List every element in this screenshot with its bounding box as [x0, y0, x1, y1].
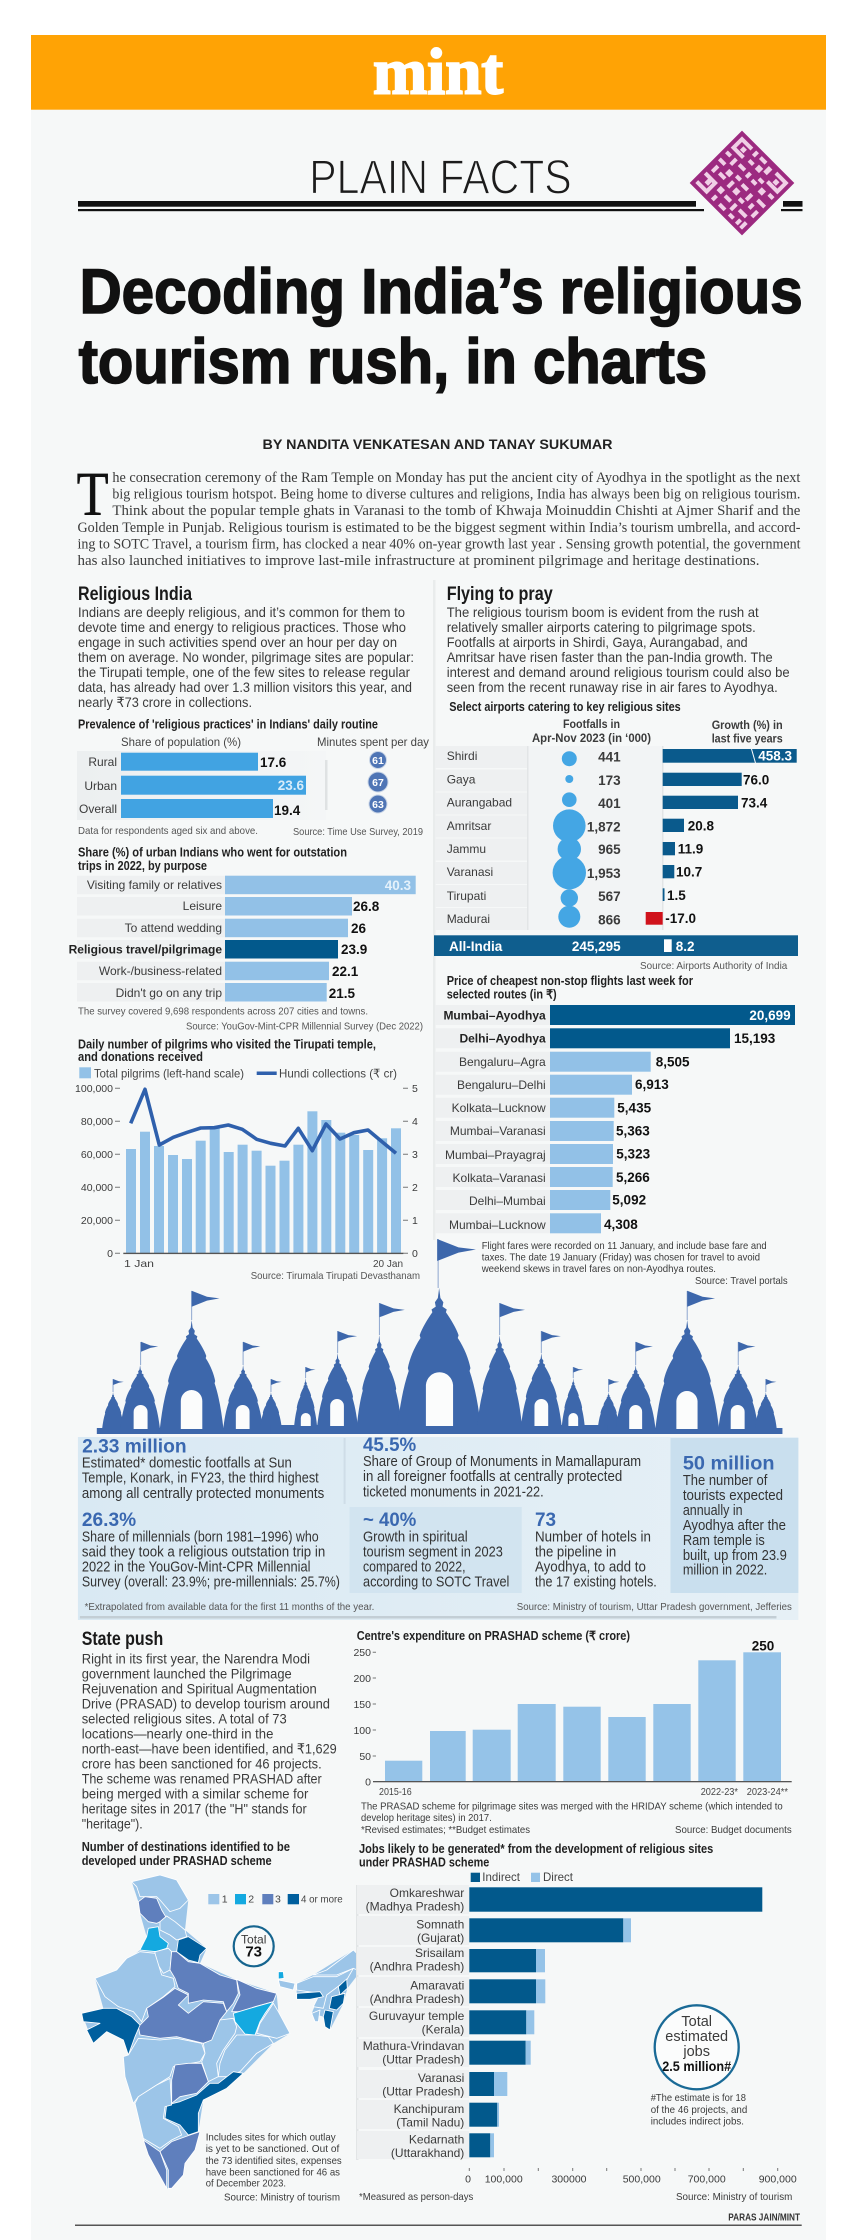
chart: trip purpose: To attend wedding [125, 921, 222, 935]
chart: jobs generated: (Uttar Pradesh) [382, 2084, 464, 2098]
right axis: 0 [412, 1248, 418, 1260]
chart: airports footfalls and growth: Select airports catering to key religious sites [449, 700, 681, 714]
chart: prashad expenditure: 0 [365, 1776, 371, 1788]
chart: religious practices prevalence: Minutes spent per day [317, 735, 429, 749]
chart: airports footfalls and growth [434, 700, 798, 972]
chart: flight prices: Mumbai–Lucknow [449, 1218, 546, 1232]
chart: tirupati pilgrims and donations: Source: Tirumala Tirupati Devasthanam [251, 1270, 420, 1282]
chart: jobs generated [356, 1842, 797, 2203]
masthead band [31, 35, 826, 110]
chart: airports footfalls and growth: 458.3 [758, 748, 792, 764]
chart: flight prices: Flight fares were recorded on 11 January, and include base fare and [482, 1240, 767, 1252]
panel: state push [82, 1629, 797, 2204]
text block: flying to pray: relatively smaller airports catering to pilgrimage spots. [447, 619, 756, 635]
chart: jobs generated: (Tamil Nadu) [396, 2116, 464, 2130]
chart: airports footfalls and growth: Jammu [447, 842, 486, 856]
callout: total estimated jobs: 2.5 million# [662, 2059, 732, 2074]
chart: jobs generated: Kanchipuram [394, 2102, 464, 2116]
text block: state push: selected religious sites. A total of 73 [82, 1711, 287, 1727]
chart: flight prices: taxes. The date 19 January (Friday) was chosen for travel to avoid [482, 1252, 760, 1264]
chart: trip purpose: Visiting family or relatives [87, 878, 222, 892]
chart: airports footfalls and growth: -17.0 [665, 911, 696, 926]
legend: Indirect [482, 1870, 521, 1884]
chart: jobs generated: Amaravati [410, 1978, 464, 1992]
right axis: 2 [412, 1182, 418, 1194]
stat: 50 million: The number of [683, 1473, 768, 1489]
chart: airports footfalls and growth: 1.5 [667, 888, 686, 903]
chart: trip purpose: 23.9 [341, 942, 367, 957]
chart: tirupati pilgrims and donations [75, 1038, 420, 1282]
chart: flight prices: Bengaluru–Agra [459, 1055, 546, 1069]
chart: trip purpose: Source: YouGov-Mint-CPR Millennial Survey (Dec 2022) [186, 1020, 423, 1032]
chart: airports footfalls and growth: 73.4 [741, 796, 768, 810]
chart: trip purpose: 26 [351, 921, 367, 936]
map legend: 4 or more [301, 1894, 343, 1906]
chart: religious practices prevalence: Rural [88, 755, 117, 769]
chart: airports footfalls and growth: Shirdi [447, 749, 477, 763]
text block: flying to pray: seen from the recent runaway rise in air fares to Ayodhya. [447, 679, 778, 695]
chart: airports footfalls and growth: Varanasi [447, 865, 493, 879]
chart: jobs generated: Guruvayur temple [369, 2009, 465, 2023]
chart: airports footfalls and growth: 173 [598, 773, 621, 788]
credit: PARAS JAIN/MINT [728, 2212, 800, 2224]
text block: state push: locations—nearly one-third in the [82, 1726, 274, 1742]
legend: Total pilgrims (left-hand scale) [94, 1066, 244, 1080]
stat: 26.3%: 26.3% [82, 1510, 136, 1531]
chart: religious practices prevalence: Prevalence of 'religious practices' in Indians' daily routine [78, 718, 378, 732]
stat: 50 million: built, up from 23.9 [683, 1548, 787, 1564]
stat: 50 million [683, 1453, 787, 1578]
logo: mint: mint [373, 35, 503, 108]
chart: airports footfalls and growth: 401 [598, 796, 621, 811]
chart: jobs generated: (Madhya Pradesh) [366, 1900, 464, 1914]
stat: 26.3%: 2022 in the YouGov-Mint-CPR Millennial [82, 1560, 310, 1576]
intro text block: Golden Temple in Punjab. Religious tourism is estimated to be the biggest segment within India’s tourism umbrella, and accord- [78, 520, 800, 536]
chart: jobs generated: (Uttar Pradesh) [382, 2052, 464, 2066]
left axis: 80,000 [81, 1116, 113, 1128]
chart: jobs generated: (Andhra Pradesh) [370, 1992, 464, 2006]
stat: 40%: ~ 40% [363, 1510, 416, 1531]
intro text block [77, 461, 801, 569]
map of India [82, 1875, 367, 2188]
chart: flight prices: Mumbai–Prayagraj [445, 1148, 546, 1162]
stat: 73 hotels [535, 1510, 657, 1591]
title: tourism rush, in charts [79, 327, 707, 397]
chart: flight prices: 5,092 [612, 1192, 646, 1208]
intro text block: Think about the popular temple ghats in Varanasi to the tomb of Khwaja Moinuddin Chishti at Ajmer Sharif and the [112, 503, 801, 519]
stat: 73 hotels: the 17 existing hotels. [535, 1575, 657, 1591]
chart: religious practices prevalence: 17.6 [260, 755, 287, 770]
section label: plain facts [78, 151, 802, 211]
x axis: 0 [465, 2173, 471, 2185]
chart: flight prices: 6,913 [635, 1077, 669, 1092]
chart: flight prices: 5,323 [616, 1146, 651, 1162]
chart: religious practices prevalence: Urban [84, 779, 117, 793]
chart: prashad expenditure: 2023-24** [747, 1786, 788, 1798]
chart: trip purpose: Religious travel/pilgrimage [69, 942, 222, 956]
callout: total estimated jobs: Total [681, 2014, 712, 2030]
chart: jobs generated: Omkareshwar [390, 1886, 464, 1900]
chart: airports footfalls and growth: 866 [598, 912, 621, 928]
chart: jobs generated: (Kerala) [422, 2022, 464, 2036]
map legend: 1 [222, 1894, 228, 1906]
chart: religious practices prevalence [77, 718, 429, 838]
stat: 40%: according to SOTC Travel [363, 1575, 509, 1591]
chart: prashad expenditure: The PRASAD scheme for pilgrimage sites was merged with the HRIDAY scheme (which intended to [361, 1800, 783, 1812]
section label: plain facts: PLAIN FACTS [309, 151, 572, 204]
chart: airports footfalls and growth: Apr-Nov 2023 (in ‘000) [532, 731, 651, 745]
text block: state push [82, 1651, 337, 1832]
intro text block: he consecration ceremony of the Ram Temple on Monday has put the ancient city of Ayodhya in the spotlight as the next [112, 470, 801, 486]
stat: 2.33 million: Estimated* domestic footfalls at Sun [82, 1456, 292, 1472]
chart: jobs generated: (Andhra Pradesh) [370, 1960, 464, 1974]
chart: trip purpose: Didn't go on any trip [116, 986, 222, 1000]
chart: destinations map: Includes sites for which outlay [206, 2132, 336, 2144]
stat: 26.3%: Survey (overall: 23.9%; pre-millennials: 25.7%) [82, 1575, 340, 1591]
chart: jobs generated: *Measured as person-days [359, 2191, 473, 2203]
chart: flight prices: Price of cheapest non-stop flights last week for [447, 974, 693, 988]
text block: religious india: Indians are deeply religious, and it’s common for them to [78, 604, 405, 620]
right axis: 4 [412, 1116, 418, 1128]
stat: 2.33 million: among all centrally protected monuments [82, 1486, 324, 1502]
text block: state push: "heritage"). [82, 1816, 143, 1832]
title [79, 257, 803, 397]
chart: destinations map: of December 2023. [206, 2178, 286, 2190]
stat: 2.33 million: Temple, Konark, in FY23, the third highest [82, 1471, 319, 1487]
chart: airports footfalls and growth: 1,872 [587, 820, 621, 834]
text block: religious india: them on average. No wonder, pilgrimage sites are popular: [78, 649, 414, 665]
panel: religious india [69, 584, 429, 1282]
text block: flying to pray: The religious tourism boom is evident from the rush at [447, 604, 759, 620]
text block: flying to pray: Amritsar have risen faster than the pan-India growth. The [447, 649, 773, 665]
chart: prashad expenditure: 2015-16 [379, 1786, 412, 1798]
stat: 40%: tourism segment in 2023 [363, 1545, 503, 1561]
chart: flight prices: 4,308 [604, 1217, 638, 1232]
chart: flight prices: 15,193 [734, 1031, 776, 1046]
chart: flight prices: selected routes (in ₹) [447, 988, 557, 1002]
chart: airports footfalls and growth: 76.0 [743, 772, 769, 788]
stat: 45.5%: in all foreigner footfalls at centrally protected [363, 1469, 622, 1485]
chart: jobs generated: (Gujarat) [417, 1931, 464, 1945]
stat: 2.33 million [82, 1437, 324, 1502]
panel: flying to pray [434, 584, 798, 1287]
panel: key statistics: *Extrapolated from available data for the first 11 months of the year. [85, 1602, 374, 1613]
chart: trip purpose: 40.3 [385, 878, 411, 893]
callout: total estimated jobs [655, 2005, 739, 2089]
text block: state push: Right in its first year, the Narendra Modi [82, 1651, 310, 1667]
legend [471, 1870, 574, 1884]
legend: Direct [543, 1870, 574, 1884]
right axis: 3 [412, 1149, 418, 1161]
text block: flying to pray [447, 604, 790, 695]
chart: jobs generated: Mathura-Vrindavan [363, 2039, 464, 2053]
left axis: 40,000 [81, 1182, 113, 1194]
map legend: 2 [248, 1894, 254, 1906]
chart: flight prices: Kolkata–Varanasi [453, 1171, 546, 1185]
chart: religious practices prevalence: 23.6 [278, 778, 304, 793]
all-india row: 8.2 [676, 939, 694, 954]
x axis: 100,000 [485, 2173, 523, 2185]
chart: destinations map: developed under PRASHAD scheme [82, 1854, 272, 1868]
minutes bubbles: 67 [372, 777, 384, 789]
chart: jobs generated: Jobs likely to be generated* from the development of religious sites [359, 1842, 713, 1856]
chart: religious practices prevalence: Overall [79, 802, 117, 816]
stat: 50 million: million in 2022. [683, 1562, 767, 1578]
chart: airports footfalls and growth: 567 [598, 889, 621, 904]
stat: 50 million: annually in [683, 1503, 743, 1519]
text block: state push: north-east—have been identified, and ₹1,629 [82, 1741, 337, 1757]
all-india row [434, 935, 798, 956]
chart: jobs generated: (Uttarakhand) [391, 2146, 464, 2160]
chart: flight prices: 5,363 [616, 1124, 650, 1138]
chart: airports footfalls and growth: 965 [598, 842, 621, 857]
stat: 26.3% [82, 1510, 340, 1591]
x axis [465, 2168, 797, 2185]
chart: airports footfalls and growth: Source: Airports Authority of India [640, 960, 787, 972]
intro text block: ing to SOTC Travel, a tourism firm, has clocked a near 40% on-year growth last year . Sensing growth potential, the government [78, 536, 801, 552]
row stripes [435, 746, 527, 930]
chart: trip purpose: Leisure [183, 899, 222, 913]
text block: state push: being merged with a similar scheme for [82, 1786, 309, 1802]
title: Decoding India’s religious [80, 257, 803, 327]
bars [126, 1111, 401, 1253]
stat: 2.33 million: 2.33 million [82, 1437, 187, 1458]
chart: flight prices: Source: Travel portals [695, 1275, 788, 1287]
text block: state push: Rejuvenation and Spiritual Augmentation [82, 1681, 317, 1697]
chart: jobs generated: under PRASHAD scheme [359, 1856, 489, 1870]
chart: airports footfalls and growth: 20.8 [688, 818, 714, 834]
chart: religious practices prevalence: 19.4 [274, 803, 301, 818]
chart: prashad expenditure: 150 [353, 1699, 371, 1711]
chart: trip purpose: trips in 2022, by purpose [78, 859, 207, 873]
chart: airports footfalls and growth: Growth (%) in [712, 718, 783, 732]
hundi line [131, 1089, 396, 1153]
heading: religious india: Religious India [78, 584, 192, 605]
stat: 50 million: Ram temple is [683, 1533, 765, 1549]
text block: religious india: data, has already had over 1.3 million visitors this year, and [78, 679, 412, 695]
callout: total 73: Total [241, 1932, 266, 1946]
left axis: 100,000 [75, 1083, 113, 1095]
chart: religious practices prevalence: Source: Time Use Survey, 2019 [293, 826, 423, 838]
chart: prashad expenditure: 100 [353, 1725, 371, 1737]
chart: jobs generated: Varanasi [418, 2071, 464, 2085]
text block: religious india: devote time and energy to religious practices. Those who [78, 619, 406, 635]
chart: religious practices prevalence: Data for respondents aged six and above. [78, 825, 258, 837]
stat: 50 million: tourists expected [683, 1488, 783, 1504]
map legend: 3 [275, 1894, 281, 1906]
chart: trip purpose: 21.5 [329, 986, 355, 1001]
callout: total estimated jobs: estimated [665, 2029, 728, 2045]
text block: religious india: nearly ₹73 crore in collections. [78, 694, 252, 710]
x axis: 300000 [551, 2173, 587, 2185]
stat: 73 hotels: Ayodhya, to add to [535, 1560, 646, 1576]
stat: 26.3%: said they took a religious outstation trip in [82, 1545, 325, 1561]
all-india row: All-India [449, 939, 503, 954]
chart: destinations map: Number of destinations identified to be [82, 1840, 290, 1854]
heading: state push: State push [82, 1629, 163, 1650]
chart: prashad expenditure: Centre's expenditure on PRASHAD scheme (₹ crore) [357, 1629, 630, 1643]
chart: tirupati pilgrims and donations: 1 Jan [124, 1258, 154, 1270]
minutes bubbles: 61 [372, 755, 384, 767]
stat: 73 hotels: 73 [535, 1510, 556, 1531]
text block: state push: government launched the Pilgrimage [82, 1666, 292, 1682]
chart: trip purpose: 26.8 [353, 899, 380, 914]
chart: prashad expenditure [353, 1629, 792, 1836]
chart: airports footfalls and growth: Gaya [447, 772, 476, 786]
stat: 50 million: 50 million [683, 1453, 774, 1474]
chart: airports footfalls and growth: 10.7 [676, 864, 702, 880]
chart: trip purpose: 22.1 [332, 964, 359, 979]
stat: 45.5%: Share of Group of Monuments in Mamallapuram [363, 1454, 641, 1470]
x axis: 500,000 [623, 2173, 661, 2185]
legend [79, 1066, 397, 1080]
stat: 45.5% [363, 1435, 641, 1501]
chart: trip purpose [69, 846, 423, 1032]
x axis: 700,000 [688, 2173, 726, 2185]
chart: prashad expenditure: 200 [353, 1673, 371, 1685]
chart: flight prices: 5,435 [617, 1100, 652, 1116]
chart: jobs generated: Srisailam [415, 1946, 464, 1960]
minutes bubbles: 63 [372, 799, 384, 811]
right axis: 1 [412, 1215, 418, 1227]
chart: airports footfalls and growth: Footfalls in [563, 717, 620, 731]
growth bars [663, 749, 797, 901]
chart: jobs generated: #The estimate is for 18 [651, 2092, 746, 2104]
chart: flight prices: Mumbai–Varanasi [450, 1124, 546, 1138]
chart: jobs generated: of the 46 projects, and [651, 2104, 747, 2116]
chart: airports footfalls and growth: Aurangabad [447, 796, 512, 810]
right axis: 5 [412, 1083, 418, 1095]
chart: flight prices: Mumbai–Ayodhya [443, 1008, 546, 1022]
callout: total 73: 73 [245, 1944, 262, 1960]
chart: prashad expenditure: 2022-23* [701, 1786, 738, 1798]
legend: Hundi collections (₹ cr) [279, 1066, 397, 1080]
chart: airports footfalls and growth: 11.9 [678, 842, 703, 856]
callout: total 73 [234, 1926, 274, 1966]
chart: jobs generated: Somnath [416, 1918, 464, 1932]
byline: BY NANDITA VENKATESAN AND TANAY SUKUMAR [262, 437, 613, 452]
chart: airports footfalls and growth: Madurai [447, 912, 490, 926]
heading: flying to pray: Flying to pray [447, 584, 553, 605]
chart: flight prices: Delhi–Mumbai [469, 1194, 546, 1208]
left axis: 0 [107, 1248, 113, 1260]
map legend [208, 1894, 343, 1906]
stat: 40%: compared to 2022, [363, 1560, 466, 1576]
stat: 50 million: Ayodhya after the [683, 1518, 786, 1534]
chart: airports footfalls and growth: 1,953 [587, 866, 621, 881]
chart: airports footfalls and growth: Tirupati [447, 889, 486, 903]
text block: flying to pray: interest and demand around religious tourism could also be [447, 664, 790, 680]
icon: QR code diamond [688, 129, 796, 237]
chart: destinations map: have been sanctioned for 46 as [206, 2166, 340, 2178]
illustration: temple silhouette [97, 1239, 782, 1434]
chart: flight prices: weekend skews in travel fares on non-Ayodhya routes. [481, 1263, 716, 1275]
chart: trip purpose: Share (%) of urban Indians who went for outstation [78, 846, 347, 860]
text block: religious india: engage in such activities spend over an hour per day on [78, 634, 397, 650]
intro text block: big religious tourism hotspot. Being home to diverse cultures and religions, India has always been big on religious tourism. [112, 486, 800, 502]
chart: tirupati pilgrims and donations: Daily number of pilgrims who visited the Tirupati temple, [78, 1038, 376, 1052]
stat: 73 hotels: Number of hotels in [535, 1530, 651, 1546]
intro text block: has also launched initiatives to improve last-mile infrastructure at prominent pilgrimage and heritage destinations. [78, 553, 760, 569]
chart: flight prices [435, 974, 795, 1287]
minutes bubbles [368, 752, 388, 813]
text block: religious india [78, 604, 414, 710]
text block: flying to pray: Footfalls at airports in Shirdi, Gaya, Aurangabad, and [447, 634, 748, 650]
all-india row: 245,295 [572, 939, 621, 954]
left axis: 60,000 [81, 1149, 113, 1161]
right axis [412, 1083, 418, 1260]
chart: prashad expenditure: 250 [353, 1647, 371, 1659]
chart: flight prices: Kolkata–Lucknow [452, 1101, 546, 1115]
chart: jobs generated: Kedarnath [409, 2132, 464, 2146]
stat: 45.5%: 45.5% [363, 1435, 416, 1456]
stat: 26.3%: Share of millennials (born 1981–1996) who [82, 1530, 319, 1546]
stat: 40%: Growth in spiritual [363, 1530, 468, 1546]
chart: prashad expenditure: *Revised estimates; **Budget estimates [361, 1824, 530, 1836]
chart: flight prices: Delhi–Ayodhya [459, 1032, 546, 1046]
text block: state push: crore has been sanctioned for 46 projects. [82, 1756, 322, 1772]
text block: state push: heritage sites in 2017 (the "H" stands for [82, 1801, 307, 1817]
x axis: 900,000 [759, 2173, 797, 2185]
chart: prashad expenditure: 50 [359, 1751, 371, 1763]
chart: prashad expenditure: Source: Budget documents [675, 1824, 792, 1836]
chart: flight prices: 8,505 [656, 1054, 690, 1070]
text block: religious india: the Tirupati temple, one of the few sites to release regular [78, 664, 410, 680]
left axis: 20,000 [81, 1215, 113, 1227]
stat: 45.5%: ticketed monuments in 2021-22. [363, 1485, 544, 1501]
footfall bubbles [553, 751, 586, 928]
column divider [433, 580, 436, 1240]
chart: flight prices: Bengaluru–Delhi [457, 1078, 546, 1092]
chart: airports footfalls and growth: last five years [712, 732, 783, 746]
chart: prashad expenditure: 250 [752, 1639, 774, 1654]
chart: trip purpose: The survey covered 9,698 respondents across 207 cities and towns. [78, 1006, 368, 1018]
chart: prashad expenditure: develop heritage sites) in 2017. [361, 1812, 492, 1824]
left axis [75, 1083, 113, 1260]
panel: key statistics [78, 1435, 798, 1620]
chart: tirupati pilgrims and donations: 20 Jan [373, 1258, 403, 1270]
drop cap: T [77, 461, 109, 529]
stat: 73 hotels: the pipeline in [535, 1545, 616, 1561]
chart: flight prices: 5,266 [616, 1170, 650, 1185]
chart: tirupati pilgrims and donations: and donations received [78, 1050, 203, 1064]
chart: jobs generated: Source: Ministry of tourism [676, 2191, 793, 2203]
chart: destinations map: Source: Ministry of tourism [224, 2192, 340, 2204]
chart: destinations map: the 73 identified sites, expenses [206, 2155, 342, 2167]
chart: destinations map [82, 1840, 367, 2204]
callout: total estimated jobs: jobs [682, 2044, 710, 2060]
chart: religious practices prevalence: Share of population (%) [121, 735, 241, 749]
chart: flight prices: 20,699 [749, 1008, 791, 1023]
stat: 40% [363, 1510, 509, 1591]
chart: destinations map: is yet to be sanctioned. Out of [206, 2143, 339, 2155]
text block: state push: The scheme was renamed PRASHAD after [82, 1771, 322, 1787]
chart: jobs generated: includes indirect jobs. [651, 2116, 744, 2128]
chart: airports footfalls and growth: 441 [598, 750, 621, 764]
chart: trip purpose: Work-/business-related [99, 964, 222, 978]
chart: airports footfalls and growth: Amritsar [447, 819, 491, 833]
panel: key statistics: Source: Ministry of tourism, Uttar Pradesh government, Jefferies [517, 1602, 792, 1613]
text block: state push: Drive (PRASAD) to develop tourism around [82, 1696, 330, 1712]
